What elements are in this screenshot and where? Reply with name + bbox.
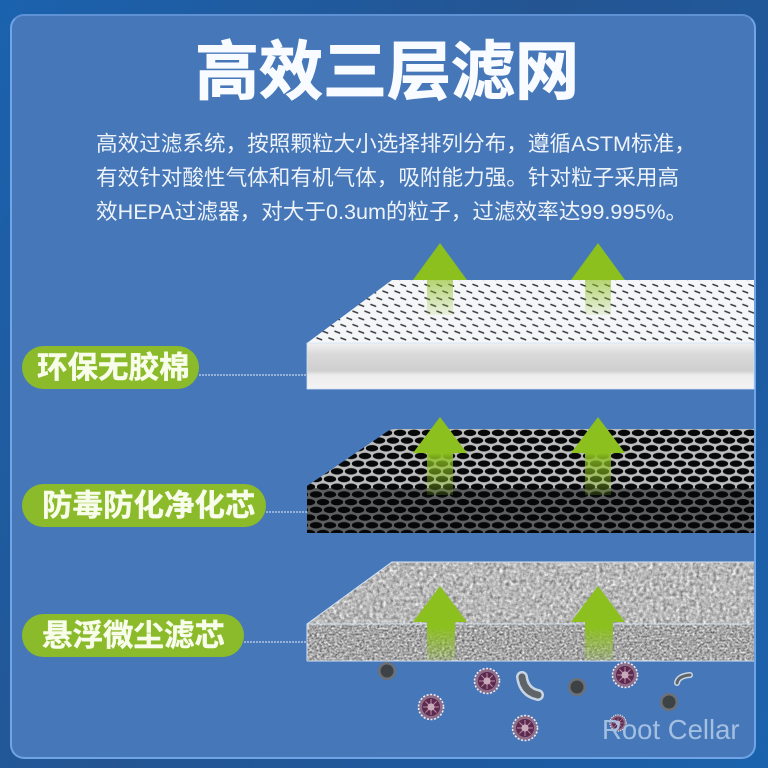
arrows on carbon layer [413, 417, 625, 495]
text block: filtration description: 效HEPA过滤器，对大于0.3um的粒子，过滤效率达99.995%。 [96, 199, 687, 224]
icon: viruses [418, 662, 638, 740]
carbon front shading [307, 488, 754, 533]
cotton top surface [307, 280, 754, 343]
icon: small bacterium [677, 675, 690, 683]
text block: filtration description: 高效过滤系统，按照颗粒大小选择排列分布，遵循ASTM标准， [96, 131, 696, 156]
text block: filtration description [96, 131, 696, 224]
filter layer: grey particulate filter [307, 560, 754, 661]
cotton front face [307, 343, 754, 389]
leader line: particulate label [244, 641, 307, 643]
particles: viruses, dust and bacteria [378, 662, 690, 740]
leader line: purification label [266, 511, 307, 513]
particulate outline [307, 562, 754, 661]
label: purification layer [22, 484, 266, 527]
leader line: cotton label [199, 374, 307, 376]
icon: large bacterium [522, 677, 538, 695]
particulate top surface [307, 560, 754, 626]
title: 高效三层滤网 [195, 36, 579, 108]
label: purification layer: 防毒防化净化芯 [42, 489, 256, 523]
arrow shafts on cotton layer [427, 280, 611, 315]
label: cotton layer: 环保无胶棉 [37, 351, 190, 385]
label: cotton layer [22, 346, 199, 389]
filter layer: white cotton [307, 243, 754, 389]
filter layer: black activated carbon [307, 417, 754, 533]
watermark: Root Cellar [602, 714, 740, 745]
arrows on particulate layer [413, 586, 625, 660]
particulate front face [307, 624, 754, 661]
illustration: three filter layers [199, 243, 754, 742]
icon: dust particles [378, 662, 678, 711]
arrow tops behind cotton layer [413, 243, 625, 280]
label: particulate layer: 悬浮微尘滤芯 [42, 619, 225, 653]
text block: filtration description: 有效针对酸性气体和有机气体，吸附能力强。针对粒子采用高 [96, 165, 679, 190]
carbon front face [307, 488, 754, 533]
label: particulate layer [22, 614, 244, 657]
carbon top surface [307, 429, 754, 488]
